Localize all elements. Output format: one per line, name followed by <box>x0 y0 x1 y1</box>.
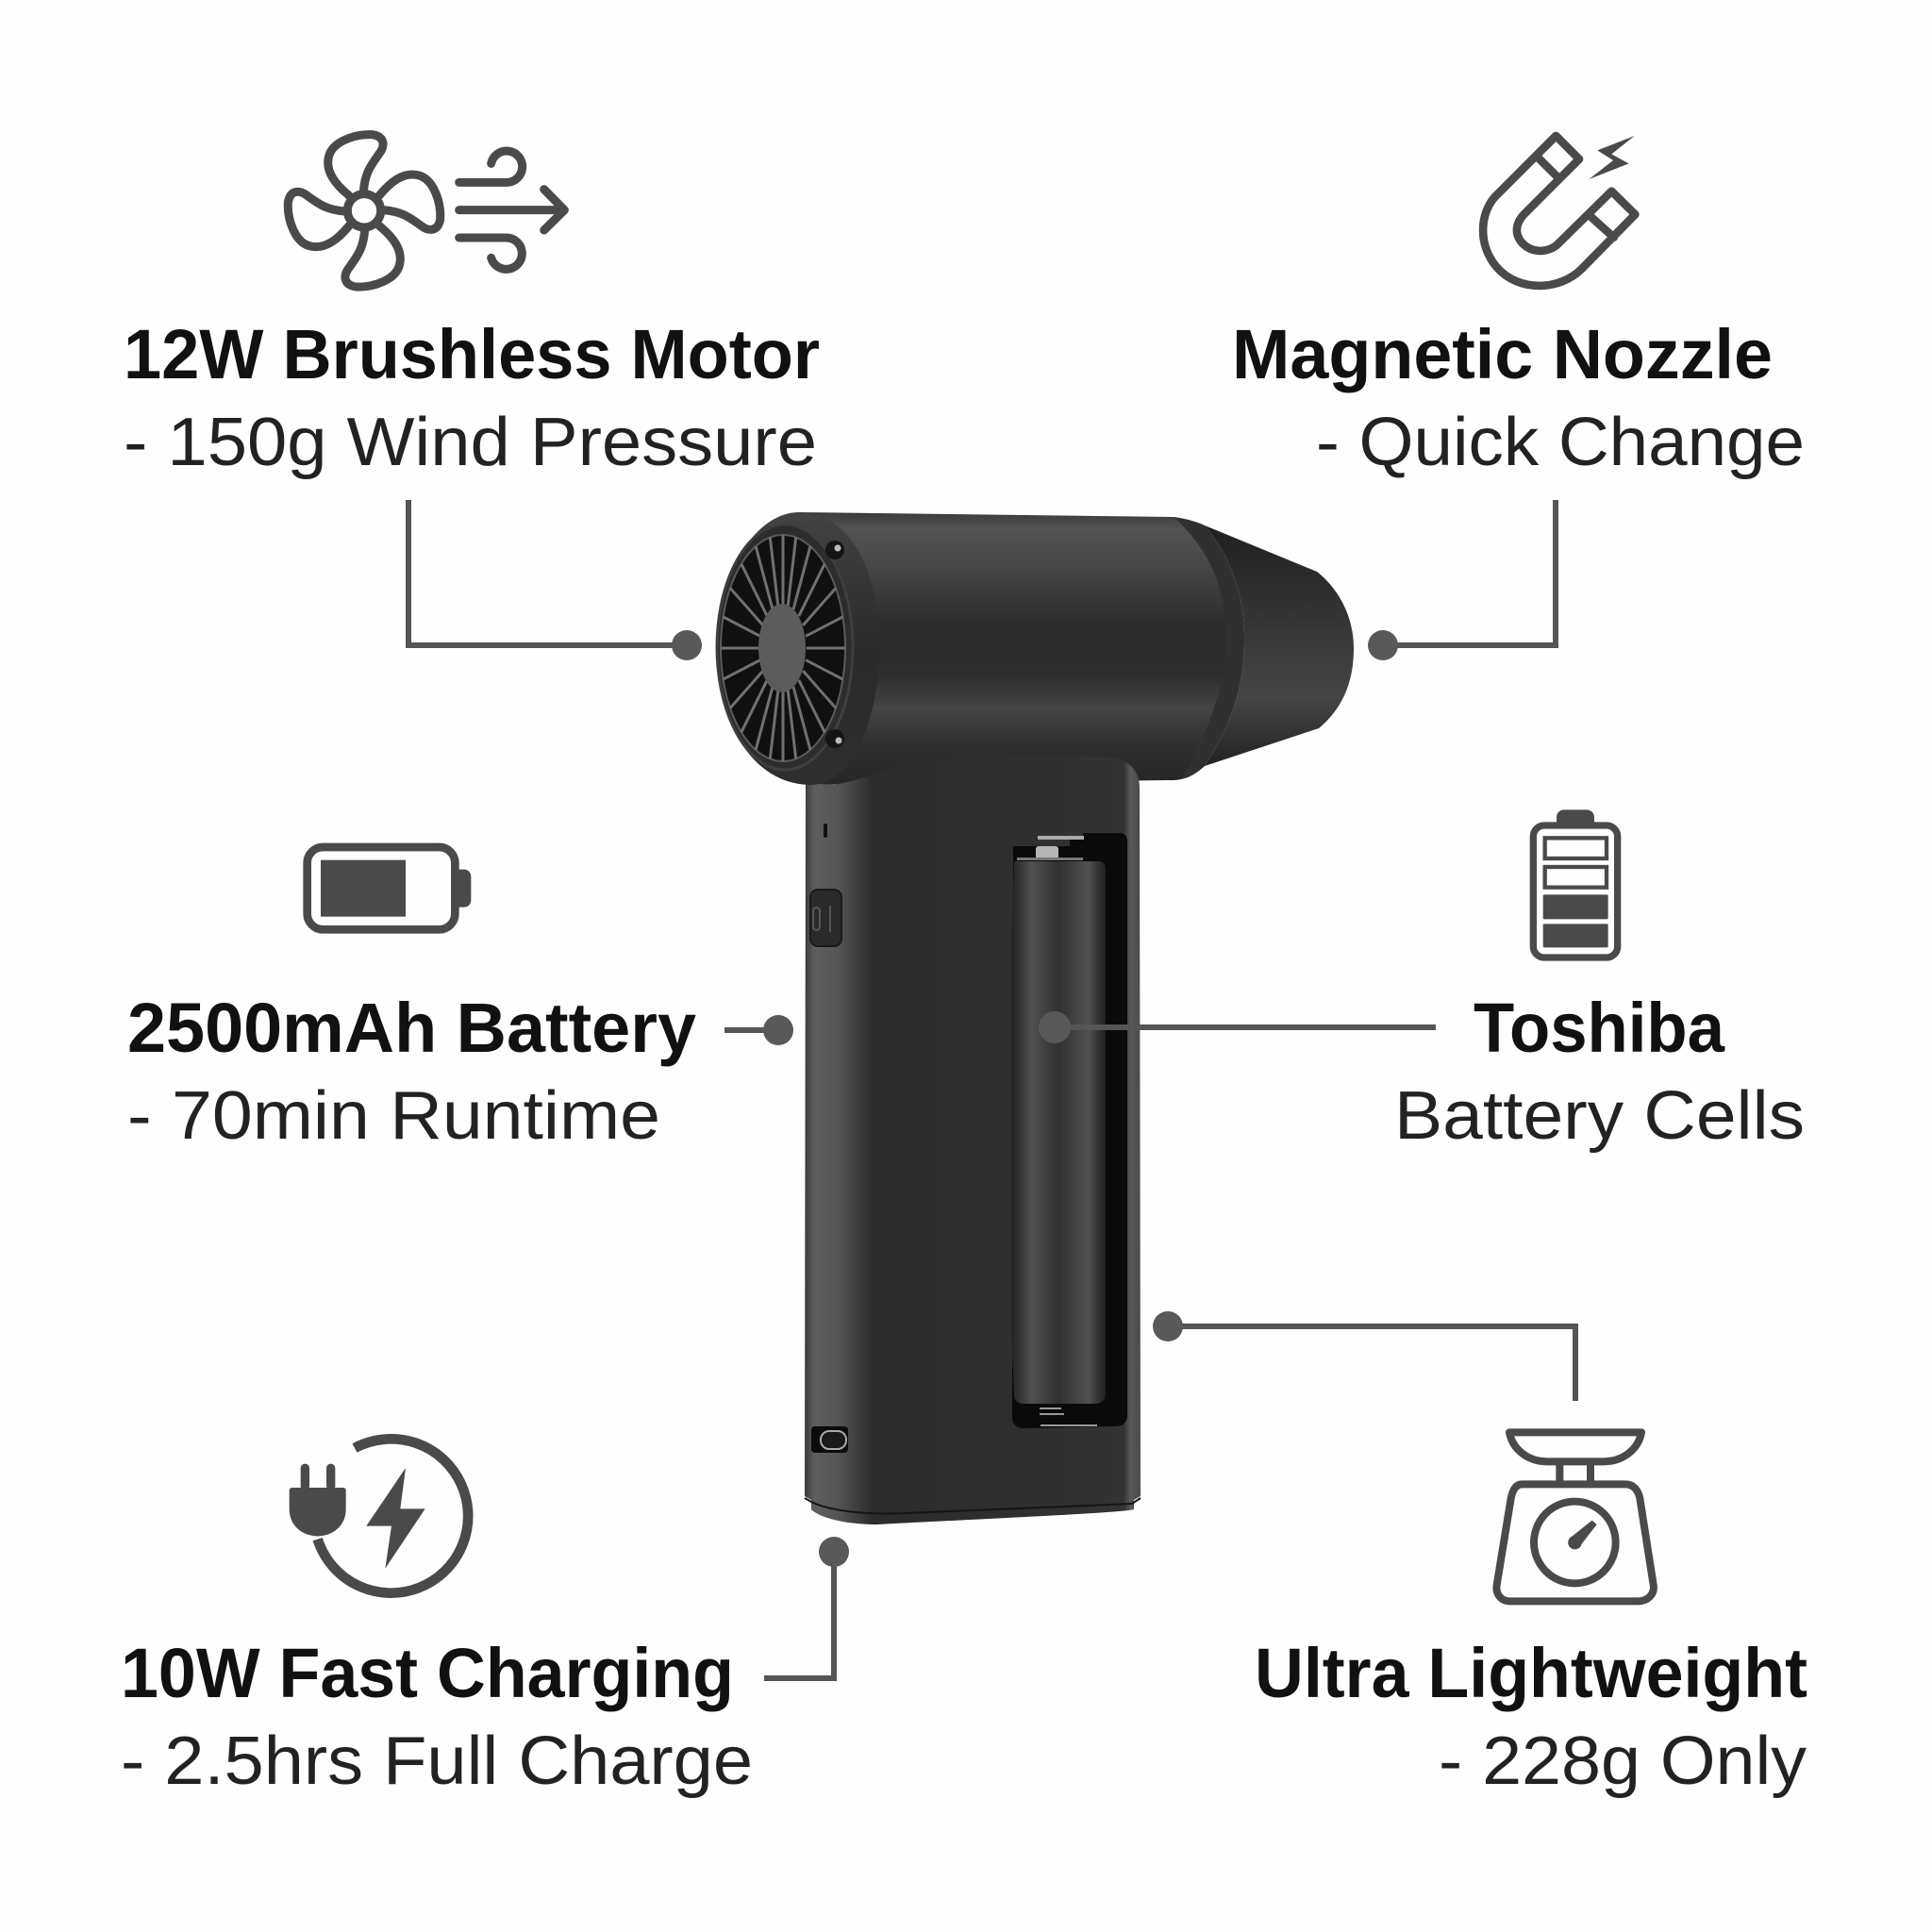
subtext: - 70min Runtime <box>127 1078 660 1154</box>
feature label: weight <box>1255 1634 1807 1799</box>
power button <box>810 890 841 946</box>
USB-C port <box>811 1426 848 1453</box>
feature label: cells <box>1394 989 1805 1154</box>
icon: kitchen scale <box>1496 1432 1654 1601</box>
feature label: motor <box>124 315 820 480</box>
connector: battery cells <box>1039 1011 1436 1043</box>
fan inner ring <box>717 525 853 770</box>
icon: fan with wind <box>288 135 564 287</box>
subtext: Battery Cells <box>1394 1078 1805 1154</box>
heading: 10W Fast Charging <box>121 1634 734 1712</box>
fan grille <box>721 535 845 761</box>
blower head cylinder <box>799 512 1236 785</box>
icon: magnet with spark <box>1483 136 1635 286</box>
connector: motor <box>408 500 702 660</box>
heading: 2500mAh Battery <box>127 989 696 1067</box>
fan end rim <box>717 512 879 785</box>
indicator light <box>824 824 827 838</box>
heading: Magnetic Nozzle <box>1232 315 1773 393</box>
heading: 12W Brushless Motor <box>124 315 820 393</box>
heading: Ultra Lightweight <box>1255 1634 1807 1712</box>
top terminal <box>1017 836 1084 860</box>
subtext: - 150g Wind Pressure <box>124 405 817 480</box>
subtext: - Quick Change <box>1316 405 1805 480</box>
bottom terminal <box>1040 1408 1097 1425</box>
battery cell <box>1011 861 1106 1404</box>
screws <box>825 541 844 748</box>
connector: charging <box>764 1537 849 1678</box>
nozzle cone <box>1205 525 1354 766</box>
subtext: - 2.5hrs Full Charge <box>121 1724 753 1799</box>
nozzle collar band <box>1174 517 1244 779</box>
heading: Toshiba <box>1474 989 1725 1067</box>
connector: weight <box>1153 1311 1575 1401</box>
handle grip <box>805 757 1141 1524</box>
icon: plug with bolt <box>290 1439 468 1593</box>
product: handheld jet blower <box>717 512 1354 1524</box>
handle foot seam <box>805 1498 1141 1513</box>
subtext: - 228g Only <box>1439 1724 1807 1799</box>
feature label: battery <box>127 989 696 1154</box>
icon: battery horizontal <box>308 847 471 929</box>
connector: battery capacity <box>724 1015 793 1045</box>
connector: nozzle <box>1368 500 1556 660</box>
battery compartment <box>1011 833 1127 1428</box>
feature label: nozzle <box>1232 315 1805 480</box>
feature label: charging <box>121 1634 753 1799</box>
icon: battery vertical cells <box>1533 809 1618 958</box>
